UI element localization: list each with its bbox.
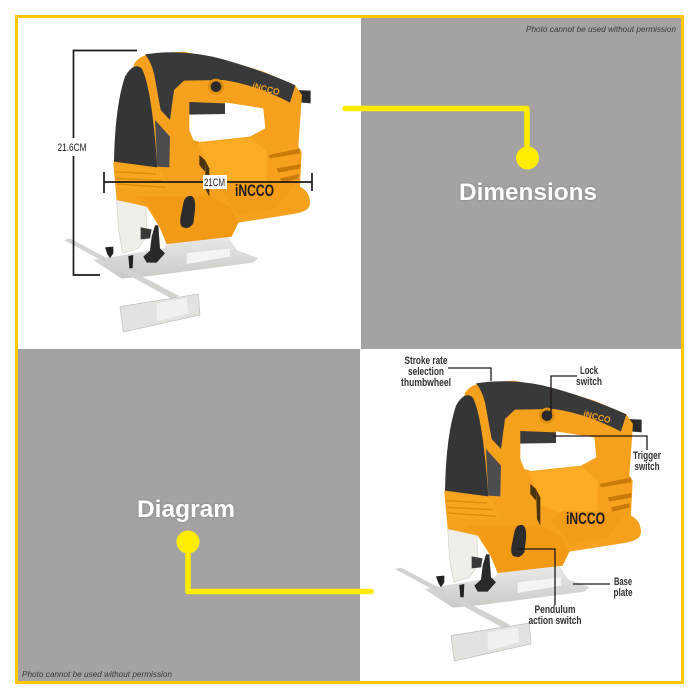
callout: stroke rate selection thumbwheel: thumbwheel xyxy=(401,377,451,389)
logos on jigsaw, diagram photo: iNCCO xyxy=(566,509,605,528)
photo: labelled jigsaw xyxy=(395,381,642,661)
photo note top right: Photo cannot be used without permission xyxy=(526,25,677,34)
height dimension marker xyxy=(58,50,137,275)
callout: lock switch: switch xyxy=(576,376,602,388)
width dimension marker xyxy=(104,172,312,193)
callout: lock switch: Lock xyxy=(580,365,599,377)
width label: 21CM xyxy=(204,177,225,189)
callout: base plate: Base xyxy=(614,576,632,588)
photo: jigsaw with dimensions xyxy=(64,52,311,332)
callout: pendulum action switch: action switch xyxy=(528,615,582,627)
logos on jigsaw, dimensions photo xyxy=(235,81,281,200)
connector: diagram xyxy=(176,530,371,592)
callout: stroke rate selection thumbwheel: selection xyxy=(408,366,444,378)
logos on jigsaw, diagram photo: iNCCO xyxy=(582,409,612,425)
callout: trigger switch: Trigger xyxy=(633,450,662,462)
callout: trigger switch: switch xyxy=(634,461,660,473)
heading: Diagram: Diagram xyxy=(137,496,235,523)
callout: lock switch xyxy=(551,365,602,413)
callout: stroke rate selection thumbwheel xyxy=(401,355,491,389)
callout: trigger switch xyxy=(553,436,662,473)
logos on jigsaw, dimensions photo: iNCCO xyxy=(251,81,281,97)
callout: base plate: plate xyxy=(614,587,632,599)
callout: stroke rate selection thumbwheel: Stroke rate xyxy=(404,355,448,367)
callout: base plate xyxy=(573,576,632,599)
panel: diagram grey background xyxy=(18,349,360,681)
height label: 21.6CM xyxy=(58,142,86,154)
connector: dimensions xyxy=(345,108,539,170)
photo note bottom left: Photo cannot be used without permission xyxy=(22,670,173,679)
callout: pendulum action switch: Pendulum xyxy=(534,604,576,616)
callout: pendulum action switch xyxy=(518,549,582,627)
logos on jigsaw, dimensions photo: iNCCO xyxy=(235,181,274,200)
heading: Dimensions: Dimensions xyxy=(459,179,597,206)
logos on jigsaw, diagram photo xyxy=(566,409,612,528)
panel: dimensions grey background xyxy=(361,18,681,349)
